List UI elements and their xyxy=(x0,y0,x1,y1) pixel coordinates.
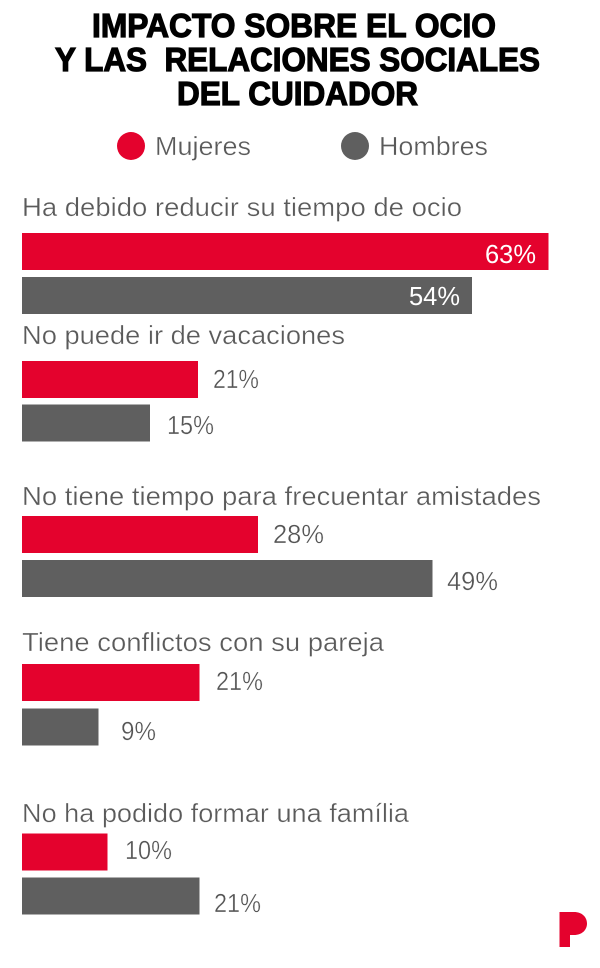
legend item: Mujeres xyxy=(117,131,251,161)
group: No ha podido formar una família: 10% xyxy=(125,835,172,865)
group: Tiene conflictos con su pareja: 9% xyxy=(121,716,156,746)
legend xyxy=(117,131,488,161)
group: No puede ir de vacaciones: 21% xyxy=(213,364,259,394)
title: Y LAS RELACIONES SOCIALES xyxy=(55,41,540,78)
title: IMPACTO SOBRE EL OCIO xyxy=(92,7,496,44)
group: Ha debido reducir su tiempo de ocio: 54% xyxy=(409,281,460,311)
group: No tiene tiempo para frecuentar amistades: No tiene tiempo para frecuentar amistades xyxy=(22,481,541,511)
group: No tiene tiempo para frecuentar amistades: 28% xyxy=(273,519,324,549)
legend item: Hombres: Hombres xyxy=(379,131,488,161)
group: No ha podido formar una família xyxy=(22,798,410,918)
group: Ha debido reducir su tiempo de ocio: Ha debido reducir su tiempo de ocio xyxy=(22,192,462,222)
group: No ha podido formar una família: 21% xyxy=(214,888,261,918)
group: No puede ir de vacaciones xyxy=(22,320,345,442)
group: Tiene conflictos con su pareja: 21% xyxy=(216,666,263,696)
group: No puede ir de vacaciones: 15% xyxy=(167,410,214,440)
group: Tiene conflictos con su pareja xyxy=(22,627,385,746)
group: No tiene tiempo para frecuentar amistades: 49% xyxy=(447,566,498,596)
group: Tiene conflictos con su pareja: Tiene conflictos con su pareja xyxy=(22,627,385,657)
icon: P logo xyxy=(560,912,587,947)
legend item: Mujeres: Mujeres xyxy=(155,131,251,161)
title: DEL CUIDADOR xyxy=(177,75,418,112)
group: No puede ir de vacaciones: No puede ir de vacaciones xyxy=(22,320,345,350)
group: No ha podido formar una família: No ha podido formar una família xyxy=(22,798,410,828)
group: Ha debido reducir su tiempo de ocio xyxy=(22,192,548,314)
group: Ha debido reducir su tiempo de ocio: 63% xyxy=(485,239,536,269)
group: No tiene tiempo para frecuentar amistades xyxy=(22,481,541,597)
title xyxy=(55,7,540,112)
